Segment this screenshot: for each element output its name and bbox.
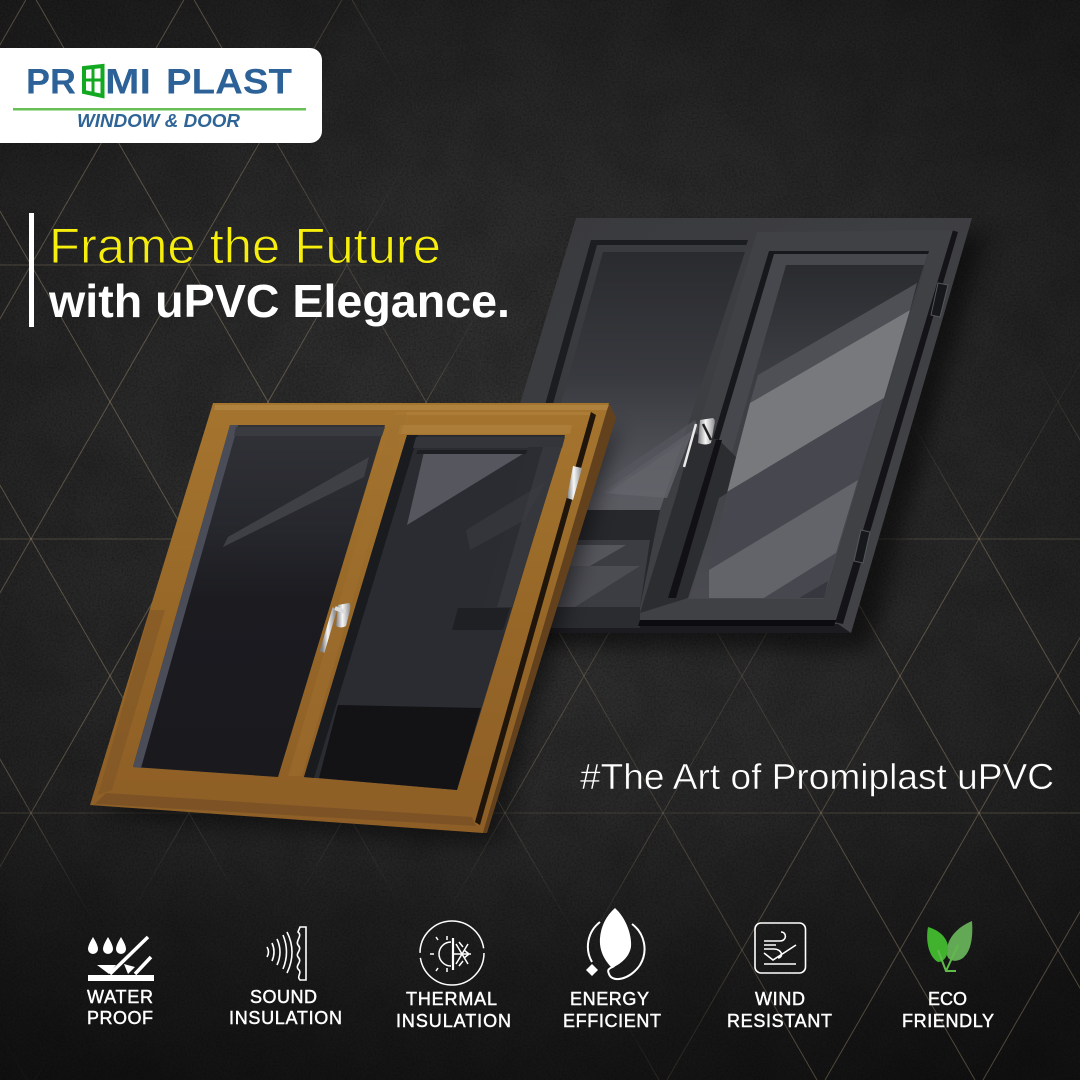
label: eco friendly: FRIENDLY <box>902 1011 994 1031</box>
label: thermal insulation: INSULATION <box>396 1011 511 1031</box>
wood window left pane <box>133 425 385 777</box>
label: energy efficient: EFFICIENT <box>563 1011 661 1031</box>
wood bottom-left shading <box>98 610 165 795</box>
label: water proof: WATER <box>87 987 153 1007</box>
black window left pane <box>454 240 748 628</box>
label: water proof: PROOF <box>87 1008 153 1028</box>
right pane reflection bands <box>750 283 917 403</box>
feature: energy efficient <box>563 908 661 1031</box>
headline <box>48 218 510 327</box>
headline: Frame the Future <box>49 218 441 274</box>
feature: eco friendly <box>902 921 994 1031</box>
label: wind resistant: RESISTANT <box>727 1011 832 1031</box>
wood window right pane <box>304 435 565 790</box>
wood bevels <box>394 412 590 415</box>
left pane reflection <box>602 430 693 498</box>
feature: thermal insulation <box>396 921 511 1031</box>
left pane reflection band <box>223 457 369 547</box>
icon: sound waves <box>267 927 306 980</box>
wood window back edge <box>483 403 616 833</box>
black window stile shading <box>640 433 736 613</box>
wood window handle <box>322 603 350 652</box>
black window outer frame <box>454 218 972 633</box>
feature: wind resistant <box>727 923 832 1031</box>
logo wordmark: PLAST <box>166 62 292 102</box>
wood window frame <box>90 403 609 833</box>
label: sound insulation: INSULATION <box>229 1008 342 1028</box>
hashtag: #The Art of Promiplast uPVC <box>580 756 1054 797</box>
label: wind resistant: WIND <box>755 989 805 1009</box>
black window hinges <box>854 283 948 563</box>
wood window inner slit <box>475 412 596 825</box>
right pane inner window reflection <box>407 452 526 525</box>
feature: sound insulation <box>229 927 342 1028</box>
black window right pane <box>665 251 929 599</box>
logo wordmark <box>26 62 292 102</box>
label: sound insulation: SOUND <box>250 987 317 1007</box>
wood window shadow <box>100 425 620 845</box>
black window handle <box>684 418 715 467</box>
right pane dark lower region <box>319 705 481 790</box>
wood window hinge <box>567 466 582 500</box>
icon: green leaves <box>927 921 972 971</box>
headline accent bar <box>29 213 34 327</box>
logo wordmark: PR <box>26 62 76 102</box>
label: energy efficient: ENERGY <box>570 989 649 1009</box>
label: thermal insulation: THERMAL <box>406 989 497 1009</box>
wood window <box>90 403 620 845</box>
black window <box>454 218 985 650</box>
black window front sash <box>640 230 953 620</box>
icon: wind in rounded square <box>755 923 806 973</box>
feature: water proof <box>87 937 154 1028</box>
icon: water proof <box>88 937 154 981</box>
headline: with uPVC Elegance. <box>48 275 510 327</box>
left pane lower sill and bands <box>515 498 664 510</box>
icon: leaf and plug <box>586 908 645 979</box>
label: eco friendly: ECO <box>928 989 967 1009</box>
logo window icon <box>84 66 103 96</box>
logo wordmark: MI <box>105 62 151 102</box>
logo tagline: WINDOW & DOOR <box>77 110 241 131</box>
right pane vertical bars <box>483 447 543 607</box>
logo panel <box>0 48 322 143</box>
black window right dark edge <box>834 230 958 624</box>
black window shadow <box>470 235 985 650</box>
logo divider <box>13 108 306 110</box>
icon: sun and snowflake in circle <box>420 921 484 985</box>
